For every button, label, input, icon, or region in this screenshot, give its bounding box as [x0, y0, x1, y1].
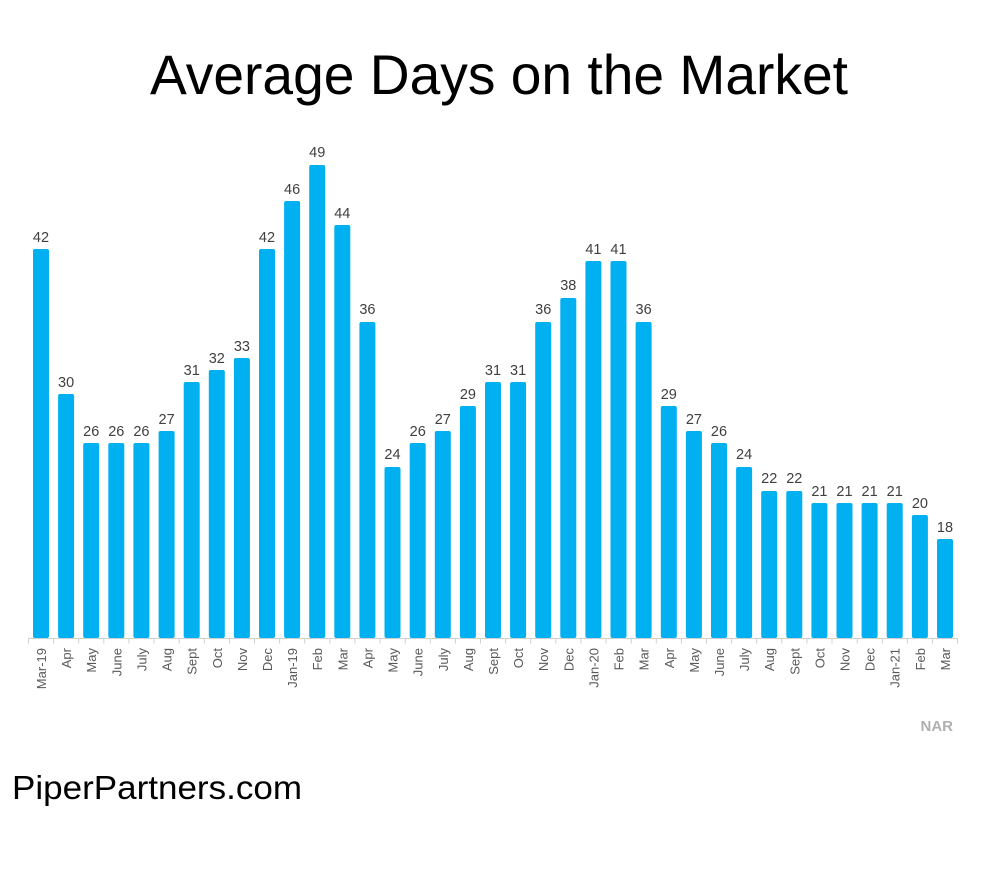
- bar: Feb: Feb: [612, 648, 626, 670]
- bar: Nov: 21: [836, 484, 853, 500]
- bar: Feb: [912, 496, 928, 670]
- bar: Apr: Apr: [360, 647, 375, 668]
- bar chart: [28, 145, 958, 689]
- bar: Apr: [359, 302, 375, 668]
- bar: Dec: Dec: [863, 648, 878, 671]
- bar: May: May: [386, 648, 400, 673]
- bar: Nov: 36: [535, 302, 551, 318]
- bar: Dec: [560, 278, 576, 671]
- bar: Aug: Aug: [160, 648, 175, 671]
- bar: Nov: Nov: [235, 648, 250, 671]
- bar: Oct: [811, 484, 827, 668]
- bar: Apr: [58, 375, 74, 668]
- bar: Aug: [159, 412, 175, 671]
- bar: Aug: 29: [460, 387, 476, 403]
- bar: Feb: 20: [912, 496, 928, 512]
- bar: Feb: [610, 242, 627, 670]
- bar: July: [736, 447, 752, 671]
- footer website: PiperPartners.com: [12, 769, 302, 806]
- bar: Mar: [636, 302, 652, 670]
- bar: Apr: [661, 387, 677, 668]
- bar: Dec: Dec: [260, 648, 275, 671]
- bar: June: 26: [410, 424, 426, 440]
- bar: June: 26: [711, 424, 727, 440]
- bar: May: [686, 412, 702, 673]
- bar: Mar: [334, 206, 350, 670]
- bar: Sept: Sept: [787, 648, 802, 675]
- bar: May: 24: [384, 447, 401, 463]
- bar: Apr: Apr: [662, 647, 677, 668]
- bar: July: 26: [133, 424, 149, 440]
- bar: Sept: 22: [786, 471, 802, 487]
- bar: Apr: 29: [661, 387, 677, 403]
- bar: Jan-19: [284, 182, 300, 688]
- bar: Feb: 49: [309, 145, 325, 161]
- bar: Sept: 31: [184, 363, 200, 379]
- bar: Dec: Dec: [561, 648, 576, 671]
- bar: Nov: Nov: [838, 648, 852, 671]
- bar: Aug: Aug: [461, 648, 476, 671]
- bar: Aug: 22: [761, 471, 777, 487]
- bar: Mar-19: [33, 230, 49, 689]
- bar: Dec: 21: [862, 484, 878, 500]
- bar: Sept: Sept: [185, 648, 200, 675]
- bar: Apr: 30: [58, 375, 74, 391]
- bar: Aug: [761, 471, 777, 671]
- bar: Mar: [937, 520, 953, 670]
- bar: Sept: [786, 471, 802, 675]
- bar: Apr: Apr: [59, 647, 74, 668]
- bar: Jan-21: Jan-21: [888, 648, 903, 688]
- bar: June: June: [109, 648, 124, 676]
- bar: June: [108, 424, 124, 676]
- bar: Jan-21: [887, 484, 903, 688]
- bar: Sept: [184, 363, 200, 675]
- bar: Oct: 31: [510, 363, 526, 379]
- bar: May: [384, 447, 401, 673]
- bar: Feb: Feb: [913, 648, 928, 670]
- bar: Feb: [309, 145, 325, 670]
- bar: July: July: [134, 648, 149, 671]
- bar: Oct: Oct: [210, 648, 225, 668]
- bar: Jan-19: 46: [284, 182, 300, 198]
- x axis: [28, 638, 958, 644]
- bar: June: [410, 424, 426, 676]
- bar: Mar-19: Mar-19: [34, 648, 49, 689]
- bar: Aug: [460, 387, 476, 671]
- bar: Dec: [259, 230, 275, 671]
- bar: June: June: [411, 648, 426, 676]
- bar: Apr: 36: [359, 302, 375, 318]
- title: Average Days on the Market: [150, 43, 848, 106]
- bar: Mar: 18: [937, 520, 953, 536]
- bar: Jan-20: 41: [585, 242, 601, 258]
- bar: July: [435, 412, 451, 671]
- bar: Oct: [209, 351, 225, 668]
- bar: Oct: 21: [811, 484, 827, 500]
- bar: Dec: 38: [560, 278, 576, 294]
- bar: Jan-20: [585, 242, 601, 688]
- bar: Nov: [535, 302, 551, 671]
- bar: Dec: [862, 484, 878, 671]
- bar: Mar: 36: [636, 302, 652, 318]
- bar: Oct: [510, 363, 526, 668]
- bar: Mar: Mar: [938, 647, 953, 670]
- bar: Aug: Aug: [762, 648, 777, 671]
- bar: June: [711, 424, 727, 676]
- bar: Dec: 42: [259, 230, 275, 246]
- bar: Feb: Feb: [310, 648, 325, 670]
- bar: July: 24: [736, 447, 752, 463]
- bar: Aug: 27: [159, 412, 175, 428]
- bar: July: July: [436, 648, 451, 671]
- source: NAR: NAR: [920, 718, 953, 735]
- bar: Oct: Oct: [812, 648, 827, 668]
- bar: Nov: [234, 339, 250, 671]
- bar: May: May: [687, 648, 702, 673]
- bar: Nov: [836, 484, 853, 671]
- bar: June: June: [712, 648, 727, 676]
- bar: Sept: [485, 363, 501, 675]
- bar: Mar: 44: [334, 206, 350, 222]
- bar: Jan-19: Jan-19: [285, 648, 300, 688]
- bar: July: July: [737, 648, 752, 671]
- bar: July: 27: [435, 412, 451, 428]
- bar: May: May: [84, 648, 99, 673]
- bar: July: [133, 424, 149, 671]
- bar: Oct: Oct: [511, 648, 526, 668]
- bar: May: 26: [83, 424, 99, 440]
- bar: Sept: Sept: [486, 648, 501, 675]
- bar: Feb: 41: [610, 242, 627, 258]
- bar: Jan-21: 21: [887, 484, 903, 500]
- bar: June: 26: [108, 424, 124, 440]
- bar: May: 27: [686, 412, 702, 428]
- bar: Mar: Mar: [637, 647, 652, 670]
- bar: Mar: Mar: [335, 647, 350, 670]
- bar: Sept: 31: [485, 363, 501, 379]
- bar: Nov: 33: [234, 339, 250, 355]
- bar: May: [83, 424, 99, 673]
- bar: Nov: Nov: [536, 648, 551, 671]
- bar: Mar-19: 42: [33, 230, 49, 246]
- bar: Jan-20: Jan-20: [586, 648, 601, 688]
- bar: Oct: 32: [209, 351, 225, 367]
